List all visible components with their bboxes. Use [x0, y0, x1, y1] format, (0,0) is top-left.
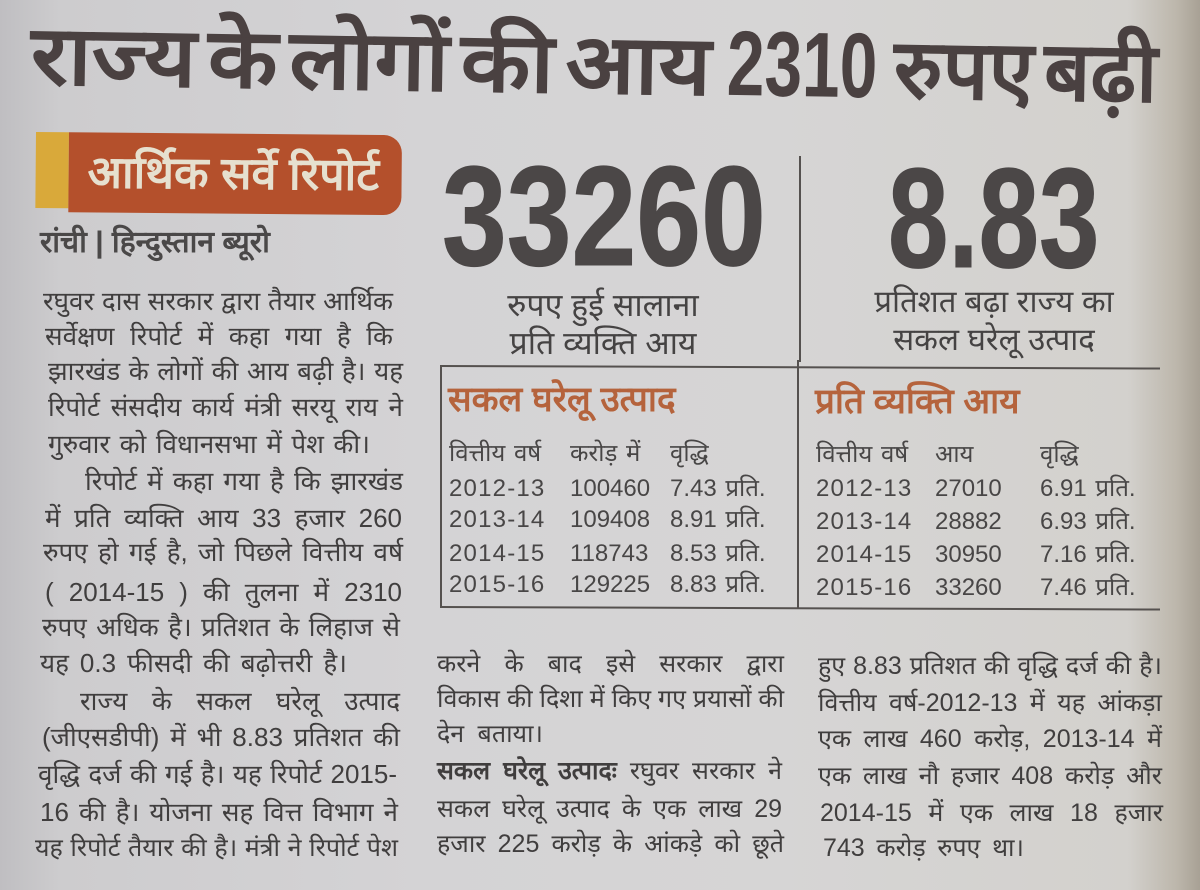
table: gross domestic product: 2012-13	[449, 475, 545, 502]
text block: left column: रिपोर्ट में कहा गया है कि झारखंड	[85, 466, 403, 496]
table: gross domestic product: 118743	[570, 540, 648, 567]
text block: right column: 2014-15 में एक लाख 18 हजार	[820, 799, 1163, 827]
big number: 33260: 33260	[442, 137, 766, 296]
text block: left column: वृद्धि दर्ज की गई है। यह रिपोर्ट 2015-	[38, 759, 397, 789]
text block: middle column: देन बताया।	[437, 720, 543, 748]
text block: left column: रुपए हो गई है, जो पिछले वित्तीय वर्ष	[43, 537, 403, 567]
text block: right column: 743 करोड़ रुपए था।	[823, 834, 1024, 862]
title	[30, 9, 1160, 120]
text block: left column: रुपए अधिक है। प्रतिशत के लिहाज से	[42, 612, 400, 642]
table: per capita income: 2014-15	[816, 541, 912, 568]
table: gross domestic product: 8.91 प्रति.	[670, 506, 766, 533]
caption: state GDP growth: प्रतिशत बढ़ा राज्य का	[874, 284, 1114, 319]
text block: left column: झारखंड के लोगों की आय बढ़ी है। यह	[48, 356, 403, 386]
table: per capita income: 7.16 प्रति.	[1040, 541, 1136, 568]
text block: middle column: करने के बाद इसे सरकार द्वारा	[437, 650, 784, 678]
text block: right column: हुए 8.83 प्रतिशत की वृद्धि दर्ज की है।	[818, 652, 1162, 680]
text block: middle column: विकास की दिशा में किए गए प्रयासों की	[437, 685, 784, 713]
table: per capita income: वित्तीय वर्ष	[816, 441, 908, 468]
table: per capita income: 30950	[935, 541, 1002, 568]
text block: left column: ( 2014-15 ) की तुलना में 2310	[45, 577, 402, 607]
text block: left column: 16 की है। योजना सह वित्त विभाग ने	[40, 797, 398, 827]
text block: left column: यह 0.3 फीसदी की बढ़ोत्तरी है।	[40, 648, 347, 678]
caption: per capita income: रुपए हुई सालाना	[507, 287, 699, 323]
table: gross domestic product: 7.43 प्रति.	[670, 475, 766, 502]
table: per capita income: 6.91 प्रति.	[1040, 475, 1136, 502]
title: रुपए बढ़ी	[893, 23, 1158, 120]
heading: GDP table: सकल घरेलू उत्पाद	[448, 380, 676, 419]
table: per capita income: 7.46 प्रति.	[1040, 574, 1136, 601]
caption: state GDP growth: सकल घरेलू उत्पाद	[893, 322, 1095, 357]
text block: middle column: हजार 225 करोड़ के आंकड़े को छूते	[437, 830, 784, 858]
heading: per capita table: प्रति व्यक्ति आय	[815, 382, 1020, 421]
table: gross domestic product: वृद्धि	[670, 440, 709, 467]
title: 2310	[726, 13, 878, 117]
section badge: economic survey report	[35, 132, 402, 215]
text block: left column: सर्वेक्षण रिपोर्ट में कहा गया है कि	[45, 321, 393, 351]
table: per capita income: 33260	[935, 574, 1002, 601]
table: per capita income	[814, 381, 1136, 601]
table: gross domestic product: 8.83 प्रति.	[670, 571, 766, 598]
caption: state GDP growth	[874, 284, 1114, 358]
text block: middle column: सकल घरेलू उत्पाद के एक लाख 29	[437, 795, 782, 823]
table: per capita income: 27010	[935, 475, 1002, 502]
table: per capita income: 2012-13	[816, 475, 912, 502]
title: राज्य के लोगों की आय	[30, 9, 712, 113]
text block: left column: में प्रति व्यक्ति आय 33 हजार 260	[45, 503, 402, 533]
table: gross domestic product: 8.53 प्रति.	[670, 540, 766, 567]
table: per capita income: 2013-14	[816, 508, 912, 535]
table: gross domestic product: 2014-15	[449, 540, 545, 567]
table: gross domestic product: 2015-16	[449, 571, 545, 598]
table: per capita income: वृद्धि	[1040, 441, 1079, 468]
text block: right column	[818, 652, 1164, 862]
table: per capita income: आय	[935, 441, 973, 468]
text block: middle column: सकल घरेलू उत्पादः रघुवर सरकार ने	[437, 757, 782, 785]
text block: left column: रिपोर्ट संसदीय कार्य मंत्री सरयू राय ने	[48, 392, 403, 422]
caption: per capita income	[507, 287, 700, 361]
text block: left column: (जीएसडीपी) में भी 8.83 प्रतिशत की	[42, 722, 400, 752]
text block: left column: यह रिपोर्ट तैयार की है। मंत्री ने रिपोर्ट पेश	[35, 834, 398, 862]
caption: per capita income: प्रति व्यक्ति आय	[510, 325, 696, 361]
byline: रांची | हिन्दुस्तान ब्यूरो	[40, 226, 270, 259]
table: gross domestic product: 129225	[570, 571, 650, 598]
table: per capita income: 28882	[935, 508, 1002, 535]
table: gross domestic product	[447, 379, 766, 598]
text block: left column: रघुवर दास सरकार द्वारा तैयार आर्थिक	[43, 286, 393, 316]
table: gross domestic product: करोड़ में	[570, 440, 640, 467]
table: gross domestic product: 109408	[570, 506, 650, 533]
big number: 8.83: 8.83	[888, 139, 1099, 298]
table: gross domestic product: 2013-14	[449, 506, 545, 533]
text block: middle column	[436, 650, 784, 859]
table: gross domestic product: 100460	[570, 475, 650, 502]
text block: left column: राज्य के सकल घरेलू उत्पाद	[80, 686, 400, 716]
section badge: economic survey report: आर्थिक सर्वे रिपोर्ट	[87, 146, 379, 200]
text block: right column: एक लाख नौ हजार 408 करोड़ और	[818, 762, 1162, 790]
text block: right column: वित्तीय वर्ष-2012-13 में यह आंकड़ा	[818, 689, 1162, 717]
text block: right column: एक लाख 460 करोड़, 2013-14 में	[818, 725, 1162, 753]
text block: left column: गुरुवार को विधानसभा में पेश की।	[48, 429, 370, 459]
table: per capita income: 6.93 प्रति.	[1040, 508, 1136, 535]
table: per capita income: 2015-16	[816, 574, 912, 601]
table: gross domestic product: वित्तीय वर्ष	[449, 440, 541, 467]
text block: left column	[35, 286, 404, 862]
